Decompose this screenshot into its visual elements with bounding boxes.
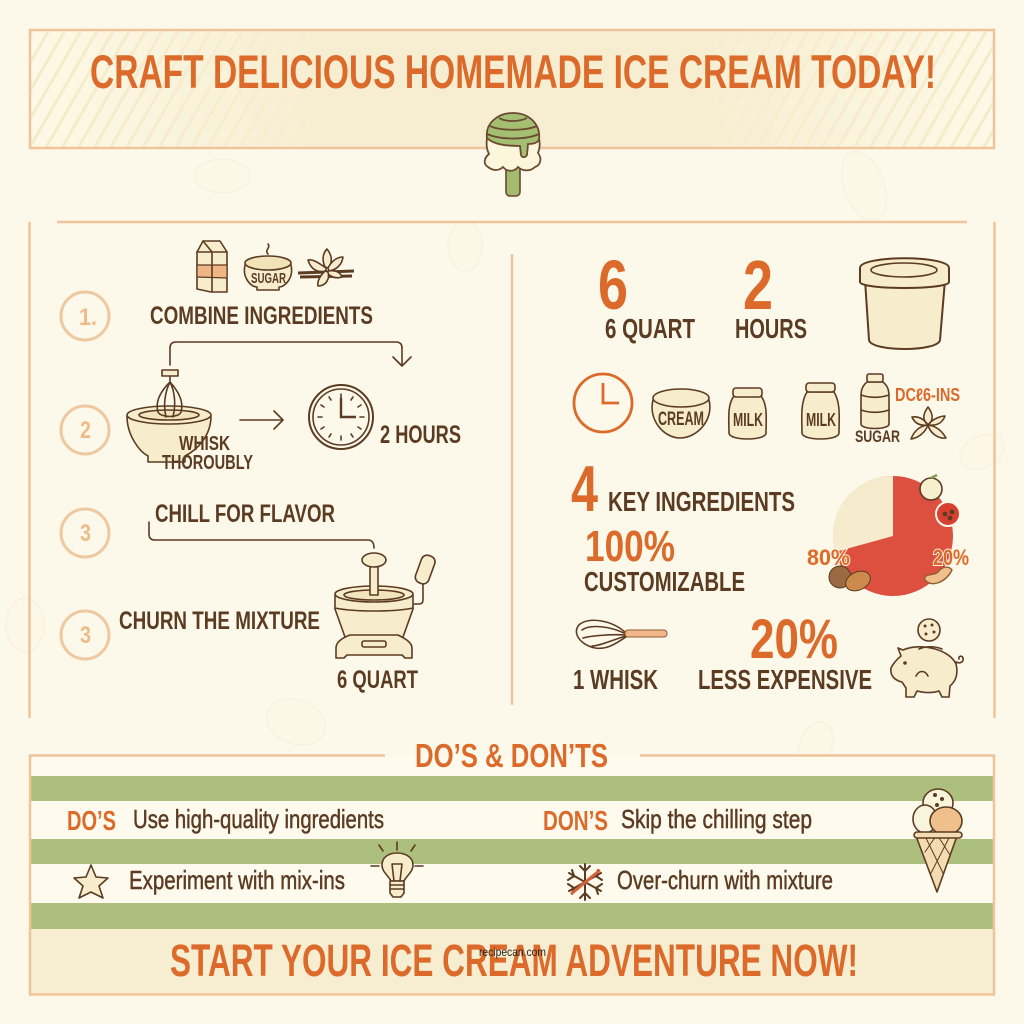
panel: steps — [61, 241, 461, 694]
label: chill for flavor: CHILL FOR FLAVOR — [155, 500, 335, 528]
stat: 20% less expensive — [698, 607, 872, 695]
icon: almonds — [829, 566, 874, 595]
step 1 badge — [61, 292, 109, 340]
do 1: DO’S — [67, 805, 116, 836]
stat: 100% customizable: 100% — [585, 522, 675, 571]
pie chart: mix-ins — [807, 475, 969, 596]
icon: star — [74, 865, 108, 898]
icon: vanilla flower — [911, 407, 946, 439]
stat: 2 hours: HOURS — [735, 313, 807, 344]
section heading: DO’S & DON’TS — [415, 737, 608, 774]
connector: chill to churn — [149, 522, 374, 548]
section fill — [30, 756, 994, 994]
stat: 4 key ingredients: 4 — [571, 452, 598, 525]
step 1 label: COMBINE INGREDIENTS — [150, 302, 373, 330]
watermark: recipecan.com — [479, 945, 546, 959]
step 1 badge: 1. — [79, 304, 97, 331]
label: garbled mix-ins: DCℓ6-INS — [895, 385, 960, 405]
icon: milk jar one: MILK — [733, 410, 763, 430]
stat: 2 hours: 2 — [743, 246, 773, 324]
stat: 100% customizable — [584, 522, 745, 597]
title banner — [30, 30, 994, 148]
icon: sugar bottle — [855, 374, 900, 446]
icon: piggy bank with cookie — [891, 619, 963, 697]
call to action band — [30, 929, 994, 994]
panel: stats — [571, 246, 969, 697]
step 2 badge: 2 — [80, 417, 91, 444]
faint background cookie shapes — [6, 145, 1010, 773]
step 3 badge: 3 — [80, 520, 91, 547]
icon: orange clock — [574, 374, 632, 432]
stat: 6 quart: 6 — [598, 246, 628, 324]
pie label 20%: 20% — [933, 545, 969, 570]
icon: red apple slice — [936, 502, 960, 526]
don't 1: Skip the chilling step — [621, 804, 812, 834]
icon: whisk in bowl — [127, 370, 211, 462]
green stripes — [30, 776, 994, 929]
icon: ice cream tub — [860, 258, 949, 349]
icon: light bulb — [371, 842, 423, 897]
label: churn the mixture: CHURN THE MIXTURE — [119, 607, 320, 635]
icon: sugar bottle: SUGAR — [855, 427, 900, 446]
icon: cream bowl — [652, 389, 710, 438]
step 4 badge: 3 — [80, 622, 91, 649]
stat: 6 quart: 6 QUART — [605, 313, 695, 344]
icon: ice cream pop — [485, 113, 540, 196]
stat: 100% customizable: CUSTOMIZABLE — [584, 566, 745, 597]
icon: whisk — [576, 620, 667, 648]
don't 1: DON’S — [543, 805, 608, 836]
icon: sugar bowl: SUGAR — [251, 270, 286, 287]
icon: cashew — [925, 567, 952, 584]
label: whisk thoroubly — [162, 433, 253, 474]
icon: ice cream churn — [335, 553, 437, 658]
icon: apple — [920, 475, 942, 500]
don't 2: Over-churn with mixture — [617, 865, 833, 895]
stat: 20% less expensive: LESS EXPENSIVE — [698, 664, 872, 695]
step 2 badge — [61, 406, 109, 454]
do 2: Experiment with mix-ins — [129, 865, 345, 895]
frame lines — [30, 222, 994, 718]
label: 1 whisk: 1 WHISK — [573, 664, 658, 695]
label: whisk thoroubly: WHISK — [179, 433, 230, 455]
stat: 20% less expensive: 20% — [750, 607, 838, 670]
panel: do's and don'ts — [30, 737, 994, 994]
icon: snowflake with slash — [568, 864, 602, 900]
icon: milk carton — [197, 241, 227, 292]
icon: vanilla flower and pods — [298, 249, 354, 286]
don't 1 — [543, 804, 812, 836]
step 4 badge — [61, 611, 109, 659]
do 1 — [67, 804, 384, 836]
label: 6 quart: 6 QUART — [337, 666, 418, 694]
step 3 badge — [61, 509, 109, 557]
pie label 80%: 80% — [807, 545, 850, 570]
stat: 4 key ingredients — [571, 452, 795, 525]
arrow: step 1 to clock — [170, 342, 411, 366]
label: whisk thoroubly: THOROUBLY — [162, 452, 253, 474]
icon: cream bowl: CREAM — [658, 409, 704, 430]
label: 2 hours: 2 HOURS — [380, 421, 461, 449]
icon: ice cream cone — [913, 789, 962, 892]
stat: 2 hours — [735, 246, 807, 344]
icon: sugar bowl — [244, 244, 292, 290]
arrow: whisk to clock — [240, 411, 283, 429]
icon: milk jar two — [802, 383, 839, 439]
icon: milk jar two: MILK — [806, 410, 836, 430]
icon: wall clock — [309, 385, 373, 449]
stat: 6 quart — [598, 246, 695, 344]
icon: milk jar one — [729, 388, 766, 439]
stat: 4 key ingredients: KEY INGREDIENTS — [608, 486, 795, 517]
do 1: Use high-quality ingredients — [133, 804, 384, 834]
